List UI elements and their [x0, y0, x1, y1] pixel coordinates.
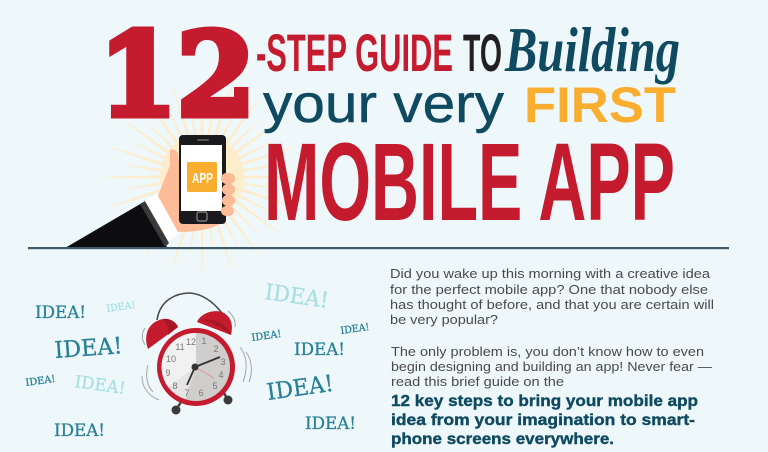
handle [157, 293, 222, 320]
idea word 9: IDEA! [340, 322, 370, 337]
title: your very: your very [263, 74, 504, 134]
clock numerals: 12 [186, 337, 196, 347]
idea word 4: IDEA! [25, 374, 56, 389]
clock numerals [165, 336, 226, 398]
paragraph 1: has thought of before, and that you are certain will [390, 297, 714, 312]
clock numerals: 9 [165, 368, 171, 378]
feet [176, 402, 181, 410]
clock numerals: 5 [212, 381, 218, 391]
clock numerals: 6 [198, 388, 204, 398]
title [99, 8, 680, 244]
idea word 6: IDEA! [54, 421, 105, 441]
sunburst behind phone [106, 81, 298, 273]
paragraph 2 [391, 344, 712, 389]
idea word 7: IDEA! [263, 280, 330, 314]
bell left [146, 319, 178, 349]
bold callout text [391, 393, 698, 448]
clock numerals: 10 [166, 354, 176, 364]
clock numerals: 8 [172, 381, 178, 391]
paragraph 2: read this brief guide on the [391, 374, 564, 389]
idea word 11: IDEA! [265, 371, 335, 406]
icon: hand holding phone: APP [192, 170, 213, 187]
title: -STEP GUIDE: -STEP GUIDE [256, 24, 453, 83]
idea word 3: IDEA! [54, 333, 123, 364]
idea word 2: IDEA! [106, 300, 136, 315]
paragraph 2: The only problem is, you don’t know how to even [391, 344, 704, 359]
divider line [28, 247, 729, 249]
intro text block [390, 266, 714, 389]
clock numerals: 3 [220, 357, 226, 367]
paragraph 1 [390, 266, 714, 327]
vibration marks [142, 311, 251, 400]
phone [179, 135, 226, 224]
paragraph 2: begin designing and building an app! Never fear — [391, 359, 712, 374]
hand palm [158, 149, 220, 232]
idea word 1: IDEA! [35, 303, 86, 323]
clock numerals: 4 [218, 370, 224, 380]
idea word 10: IDEA! [294, 340, 345, 360]
fingers [221, 173, 235, 184]
clock numerals: 1 [201, 336, 207, 346]
icon: alarm clock [142, 293, 251, 414]
idea word 12: IDEA! [305, 414, 356, 434]
paragraph 1: be very popular? [390, 312, 498, 327]
bold callout text: phone screens everywhere. [391, 431, 614, 448]
clock hands [195, 357, 220, 367]
title: 12: 12 [99, 8, 255, 142]
title: FIRST: FIRST [524, 77, 676, 133]
clock body [157, 328, 235, 406]
clock numerals: 7 [184, 388, 190, 398]
paragraph 1: Did you wake up this morning with a creative idea [390, 266, 711, 281]
idea words [25, 280, 370, 441]
bell right [197, 311, 232, 335]
idea word 8: IDEA! [251, 329, 282, 344]
clock numerals: 2 [213, 344, 219, 354]
paragraph 1: for the perfect mobile app? One that nobody else [390, 282, 708, 297]
title: TO: TO [463, 24, 502, 83]
bold callout text: 12 key steps to bring your mobile app [391, 393, 698, 410]
icon: hand holding phone [65, 135, 235, 248]
clock numerals: 11 [175, 342, 185, 352]
bold callout text: idea from your imagination to smart- [391, 412, 695, 429]
idea word 5: IDEA! [73, 372, 127, 399]
sleeve [65, 203, 167, 248]
shirt cuff [145, 194, 180, 241]
app tile [187, 162, 217, 192]
title: Building: Building [504, 14, 680, 85]
